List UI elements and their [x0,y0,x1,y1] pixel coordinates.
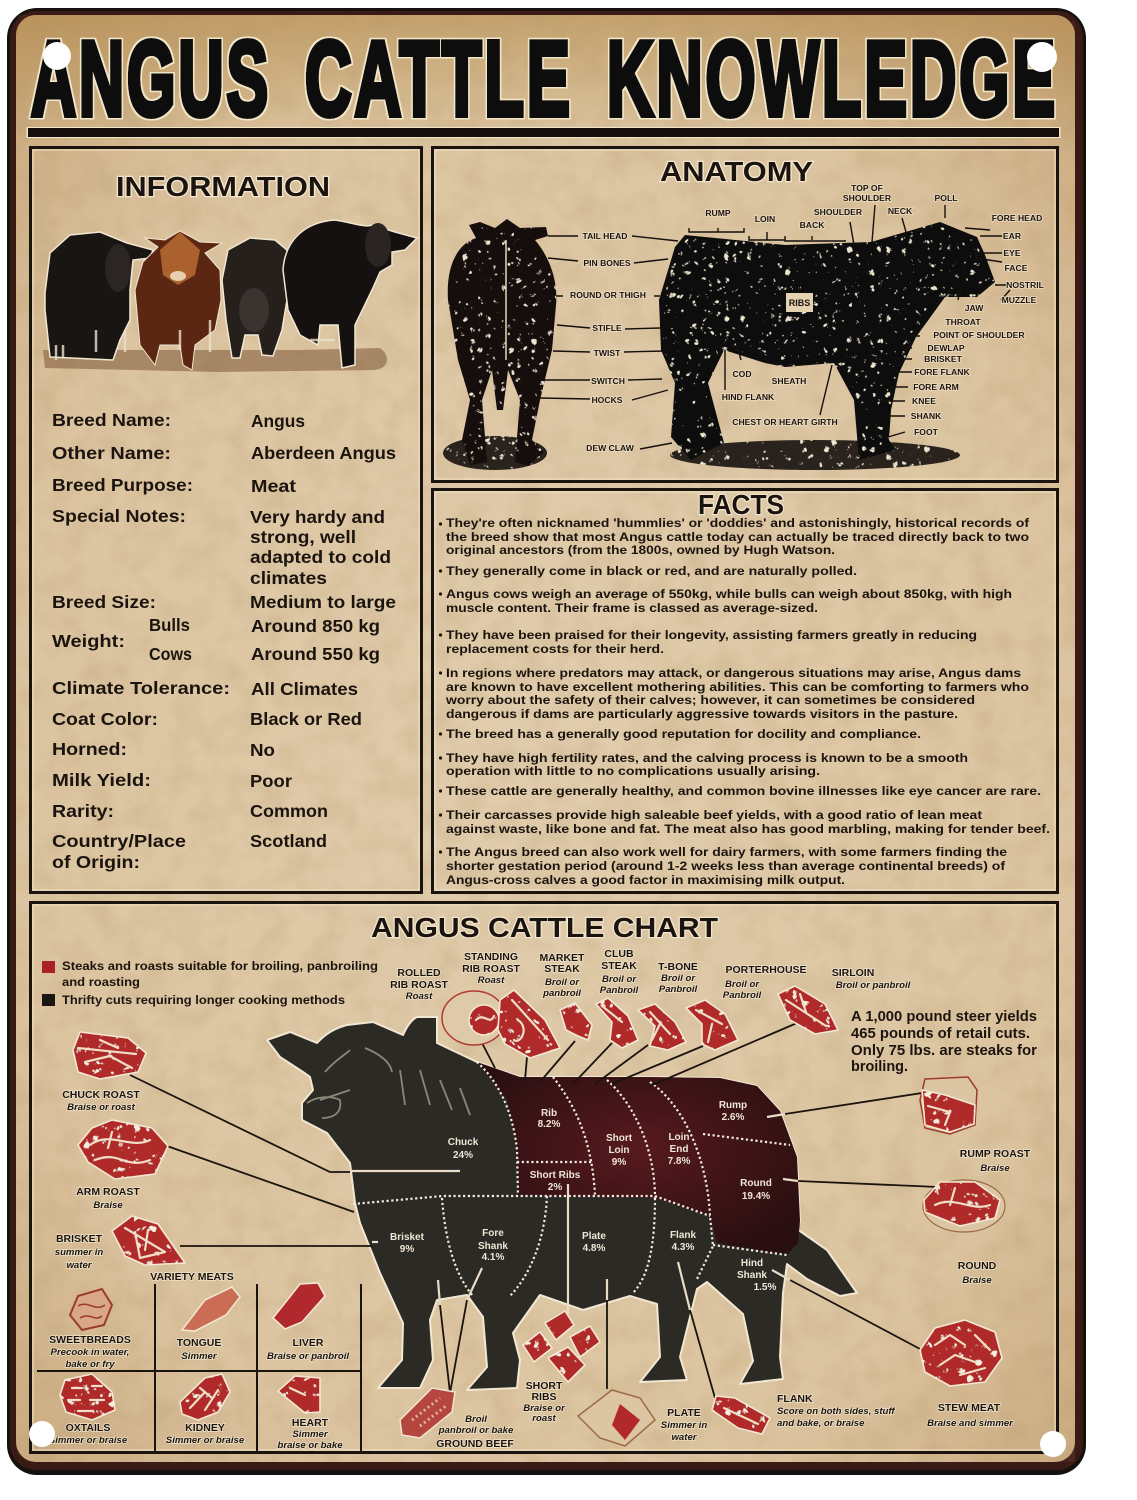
section labels: Short [606,1133,633,1144]
label: kidney: Simmer or braise [166,1435,245,1446]
panel: angus cattle chart [30,902,1058,1452]
label: tongue [177,1337,221,1362]
section labels: 9% [612,1157,626,1168]
anatomy labels: FACE [1005,263,1028,273]
fact text: In regions where predators may attack, or dangerous situations may arise, Angus dams [446,666,1021,680]
fact text: operation with little to no complications usually arising. [446,764,820,778]
anatomy labels: COD [732,369,752,379]
label: oxtails: OXTAILS [66,1422,110,1434]
anatomy labels: NECK [888,206,913,216]
anatomy labels: EYE [1003,248,1021,258]
section labels: 24% [453,1150,473,1161]
fact text: the breed show that most Angus cattle today can actually be traced directly back to two [446,530,1029,544]
anatomy labels: STIFLE [592,323,622,333]
icon: flank [712,1396,770,1434]
section labels: Flank [670,1230,696,1241]
ribs tag: RIBS [789,298,810,308]
fact text: Angus-cross calves a good factor in maximising milk output. [446,873,845,887]
section labels: Fore [482,1228,504,1239]
label: plate: PLATE [667,1407,701,1419]
icon: market steak [560,1003,592,1040]
label: porterhouse: Panbroil [723,990,762,1001]
anatomy labels: RUMP [705,208,731,218]
breed details table: Rarity: [52,801,114,821]
anatomy labels: FORE ARM [913,382,959,392]
icon: brisket [112,1216,185,1265]
fact text: original ancestors (from the 1800s, owned by Hugh Watson. [446,543,835,557]
breed details table: Angus [251,411,305,431]
section labels: Short Ribs [530,1170,581,1181]
icon: club steak [596,998,638,1048]
anatomy labels: THROAT [945,317,981,327]
label: kidney [166,1422,245,1446]
callout: retail yield: broiling. [851,1059,908,1075]
anatomy labels: MUZZLE [1002,295,1037,305]
breed details table: Black or Red [250,709,362,729]
label: flank [777,1393,895,1429]
anatomy labels: NOSTRIL [1006,280,1044,290]
label: variety meats: VARIETY MEATS [150,1271,234,1283]
maroon prime cuts [477,1062,800,1255]
icon: heart [278,1376,320,1413]
label: club steak: Broil or [602,974,637,985]
label: arm roast: Braise [93,1200,123,1211]
breed details table: Breed Size: [52,592,156,612]
label: ground beef: GROUND BEEF [436,1438,514,1450]
fact text: The Angus breed can also work well for dairy farmers, with some farmers finding the [446,845,1007,859]
section labels: 4.3% [672,1242,695,1253]
section labels: Chuck [448,1137,479,1148]
label: market steak: STEAK [544,963,580,975]
icon: t-bone [638,1004,686,1050]
label: brisket: summer in [55,1247,103,1258]
heading: anatomy: ANATOMY [660,156,813,187]
label: club steak: Panbroil [600,985,639,996]
label: plate [661,1407,707,1443]
anatomy labels: ROUND OR THIGH [570,290,646,300]
label: rolled rib roast: Roast [406,991,433,1002]
pointer lines [520,205,1010,449]
anatomy labels: KNEE [912,396,936,406]
label: stew meat: Braise and simmer [927,1418,1014,1429]
icon: rolled rib roast [442,991,506,1045]
breed details table: Bulls [149,615,190,635]
section labels: Loin [668,1132,690,1143]
breed details table: Around 550 kg [251,644,380,664]
title rule [28,128,1059,137]
label: arm roast: ARM ROAST [76,1186,140,1198]
label: t-bone [658,961,698,995]
label: stew meat [927,1402,1014,1429]
icon: liver [273,1283,325,1329]
callout: retail yield: Only 75 lbs. are steaks for [851,1043,1037,1059]
section labels: 1.5% [754,1282,777,1293]
section dividers [353,1062,790,1296]
callout: retail yield: A 1,000 pound steer yields [851,1009,1037,1025]
legend: Thrifty cuts requiring longer cooking methods [62,995,345,1007]
label: plate: water [671,1432,698,1443]
fact text: shorter gestation period (around 1-2 weeks less than average continental breeds) of [446,859,1006,873]
anatomy labels: HOCKS [591,395,623,405]
photo: four angus cattle [43,220,417,372]
label: porterhouse [723,964,807,1001]
icon: sirloin [778,986,838,1034]
label: short ribs [523,1380,566,1424]
breed details table [52,410,396,872]
section labels: Hind [741,1258,763,1269]
breed details table: Scotland [250,831,327,851]
breed details table: No [250,740,275,760]
label: short ribs: Braise or [523,1403,566,1414]
label: heart: HEART [292,1417,329,1429]
label: rump roast: Braise [980,1163,1010,1174]
legend [42,961,378,1007]
breed details table: Weight: [52,631,125,651]
label: stew meat: STEW MEAT [938,1402,1001,1414]
label: short ribs: RIBS [531,1391,557,1403]
anatomy labels: POLL [935,193,957,203]
label: chuck roast: CHUCK ROAST [62,1089,140,1101]
fact text: muscle content. Their frame is classed as average-sized. [446,601,818,615]
anatomy labels: BRISKET [924,354,963,364]
face and shoulder detail [307,1048,470,1118]
label: ground beef [436,1414,514,1450]
anatomy labels: JAW [965,303,984,313]
breed details table: Breed Purpose: [52,475,193,495]
label: standing rib roast [462,951,520,986]
label: sweetbreads [49,1334,131,1370]
fact text: Angus cows weigh an average of 550kg, while bulls can weigh about 850kg, with high [446,587,1012,601]
label: flank: Score on both sides, stuff [777,1406,895,1417]
anatomy labels: SWITCH [591,376,625,386]
breed details table: Special Notes: [52,506,186,526]
label: club steak [600,948,639,996]
title: ANGUS [31,20,271,138]
icon: arm roast [78,1120,168,1179]
legend: and roasting [62,977,140,989]
label: sirloin: SIRLOIN [832,967,874,979]
label: t-bone: Broil or [661,973,696,984]
label: brisket [55,1233,103,1271]
label: sweetbreads: bake or fry [65,1359,115,1370]
panel: facts [432,489,1058,892]
section labels: Plate [582,1231,606,1242]
heading: information: INFORMATION [116,171,330,202]
breed details table: Country/Place [52,831,186,851]
fact text: These cattle are generally healthy, and common bovine illnesses like eye cancer are rare. [446,784,1041,798]
label: heart [277,1417,343,1451]
anatomy labels: TAIL HEAD [582,231,628,241]
panel: information [30,148,422,892]
anatomy labels: POINT OF SHOULDER [933,330,1025,340]
breed details table: Cows [149,644,192,664]
section labels: 7.8% [668,1156,691,1167]
anatomy labels: FORE FLANK [914,367,970,377]
label: arm roast [76,1186,140,1211]
label: brisket: BRISKET [56,1233,103,1245]
icon: standing rib roast [498,990,560,1058]
fact text: worry about the safety of their calves; however, it can sometimes be considered [445,693,975,707]
section labels: Brisket [390,1232,425,1243]
label: sirloin [832,967,911,991]
callout: retail yield: 465 pounds of retail cuts. [851,1026,1030,1042]
section labels: Shank [737,1270,767,1281]
fact text [445,516,1050,887]
anatomy labels: FORE HEAD [992,213,1042,223]
anatomy labels: SHOULDER [814,207,863,217]
leader lines [130,1023,938,1398]
label: round [958,1260,997,1286]
title: CATTLE [305,20,573,138]
label: rolled rib roast [390,967,448,1002]
breed details table: Around 850 kg [251,616,380,636]
section labels: 9% [400,1244,414,1255]
icon: rump roast [920,1077,977,1134]
breed details table: Meat [251,476,296,496]
fact text: are known to have excellent mothering abilities. This can be comforting to farmers who [446,680,1029,694]
breed details table: Aberdeen Angus [251,443,396,463]
ribs tag [786,293,813,312]
icon: round [923,1180,1005,1232]
section labels: End [670,1144,688,1155]
anatomy labels: SHANK [911,411,942,421]
icon: short ribs [523,1311,600,1382]
icon: sweetbreads [70,1289,112,1330]
section labels: Rib [541,1108,557,1119]
anatomy labels: LOIN [755,214,775,224]
fact text: They have been praised for their longevity, assisting farmers greatly in reducing [446,628,977,642]
label: flank: FLANK [777,1393,813,1405]
label: club steak: CLUB [604,948,634,960]
icon: tongue [182,1287,240,1331]
label: standing rib roast: Roast [478,975,505,986]
label: market steak: MARKET [540,952,585,964]
label: standing rib roast: STANDING [464,951,518,963]
section labels: 19.4% [742,1191,770,1202]
label: rump roast [960,1148,1031,1174]
section labels: Loin [608,1145,630,1156]
anatomy labels: EAR [1003,231,1022,241]
heading: chart: ANGUS CATTLE CHART [371,912,718,943]
breed details table: of Origin: [52,852,140,872]
title [31,20,1058,138]
label: round: Braise [962,1275,992,1286]
label: sweetbreads: SWEETBREADS [49,1334,131,1346]
fact text: Their carcasses provide high saleable beef yields, with a good ratio of lean meat [446,808,982,822]
fact text: They generally come in black or red, and are naturally polled. [446,564,857,578]
breed details table: Common [250,801,328,821]
label: ground beef: Broil [465,1414,487,1425]
label: porterhouse: PORTERHOUSE [725,964,807,976]
label: market steak: panbroil [542,988,581,999]
label: heart: Simmer [292,1429,329,1440]
section labels: Shank [478,1241,508,1252]
icon: porterhouse [686,1000,738,1050]
breed details table: Other Name: [52,443,171,463]
label: short ribs: SHORT [526,1380,563,1392]
label: t-bone: Panbroil [659,984,698,995]
anatomy labels [570,183,1044,453]
label: market steak [540,952,585,999]
anatomy labels: DEW CLAW [586,443,635,453]
breed details table: climates [250,568,327,588]
label: liver [267,1337,349,1362]
label: club steak: STEAK [601,960,637,972]
breed details table: Poor [250,771,292,791]
anatomy labels: PIN BONES [583,258,631,268]
cow silhouette with beef sections [267,1017,857,1390]
section labels [390,1100,777,1293]
heading: facts: FACTS [698,489,784,520]
breed details table: Breed Name: [52,410,171,430]
fact bullets [439,522,442,854]
label: standing rib roast: RIB ROAST [462,963,520,975]
legend: Steaks and roasts suitable for broiling, panbroiling [62,961,378,973]
label: flank: and bake, or braise [777,1418,865,1429]
breed details table: Coat Color: [52,709,158,729]
label: t-bone: T-BONE [658,961,698,973]
label: sirloin: Broil or panbroil [836,980,911,991]
label: sweetbreads: Precook in water, [51,1347,129,1358]
breed details table: Medium to large [250,592,396,612]
anatomy labels: SHOULDER [843,193,892,203]
label: porterhouse: Broil or [725,979,760,990]
section labels: 2.6% [722,1112,745,1123]
fact text: dangerous if dams are particularly aggressive towards visitors in the pasture. [446,707,958,721]
anatomy labels: TWIST [594,348,621,358]
fact text: They're often nicknamed 'hummlies' or 'doddies' and astonishingly, historical records of [446,516,1030,530]
icon: plate [578,1390,655,1446]
icon: chuck roast [73,1032,146,1079]
section labels: Rump [719,1100,747,1111]
anatomy labels: CHEST OR HEART GIRTH [732,417,838,427]
fact text: against waste, like bone and fat. The meat also has good marbling, making for tender beef. [446,822,1050,836]
label: brisket: water [66,1260,93,1271]
icon: stew meat [920,1320,1002,1386]
fact text: The breed has a generally good reputation for docility and compliance. [446,727,921,741]
anatomy labels: SHEATH [772,376,806,386]
anatomy labels: TOP OF [851,183,883,193]
label: heart: braise or bake [277,1440,343,1451]
label: chuck roast [62,1089,140,1113]
label: rump roast: RUMP ROAST [960,1148,1031,1160]
breed details table: All Climates [251,679,358,699]
illustration: side view of cow [659,222,995,470]
illustration: rear view of cow [443,219,556,470]
section labels: Round [740,1178,772,1189]
label: chuck roast: Braise or roast [67,1102,136,1113]
section labels: 8.2% [538,1119,561,1130]
panel: anatomy [432,148,1058,482]
label: market steak: Broil or [545,977,580,988]
breed details table: adapted to cold [250,547,391,567]
section labels: 4.8% [583,1243,606,1254]
breed details table: Very hardy and [250,507,385,527]
label: plate: Simmer in [661,1420,707,1431]
icon: kidney [180,1374,230,1420]
section labels: 4.1% [482,1252,505,1263]
label: liver: Braise or panbroil [267,1351,349,1362]
icon: ground beef [400,1388,455,1438]
breed details table: strong, well [250,527,356,547]
anatomy labels: BACK [800,220,825,230]
label: tongue: TONGUE [177,1337,221,1349]
label: oxtails [49,1422,128,1446]
icon: oxtails [60,1374,115,1420]
anatomy labels: HIND FLANK [722,392,775,402]
label: ground beef: panbroil or bake [438,1425,514,1436]
breed details table: Climate Tolerance: [52,678,230,698]
fact text: They have high fertility rates, and the calving process is known to be a smooth [446,751,968,765]
fact text: replacement costs for their herd. [446,642,664,656]
label: oxtails: Simmer or braise [49,1435,128,1446]
label: liver: LIVER [293,1337,324,1349]
label: round: ROUND [958,1260,997,1272]
breed details table: Milk Yield: [52,770,151,790]
anatomy labels: DEWLAP [927,343,965,353]
section labels: 2% [548,1182,562,1193]
label: short ribs: roast [532,1413,557,1424]
callout: retail yield [851,1009,1037,1075]
label: rolled rib roast: ROLLED [397,967,441,979]
breed details table: Horned: [52,739,127,759]
label: rolled rib roast: RIB ROAST [390,979,448,991]
label: kidney: KIDNEY [185,1422,225,1434]
anatomy labels: FOOT [914,427,939,437]
variety meats grid lines [37,1284,361,1452]
label: tongue: Simmer [181,1351,218,1362]
